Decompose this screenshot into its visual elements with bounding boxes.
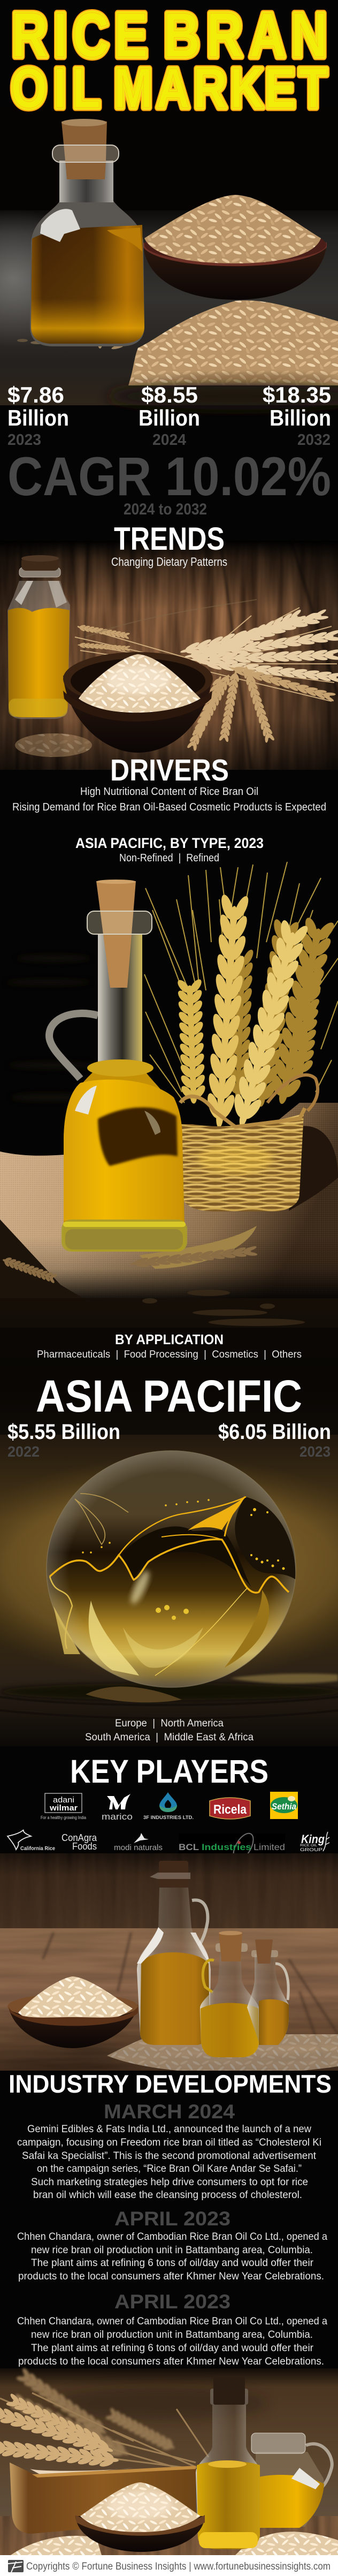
small oil jug back: [247, 1939, 289, 2045]
title line 1: RICEBRAN: [11, 0, 327, 70]
rice heap in foreground: [17, 300, 338, 410]
development: March 2024: Such marketing strategies help drive consumers to opt for rice: [31, 2177, 308, 2188]
stat 2024: 2024: [152, 431, 186, 449]
development: April 2023 second entry: APRIL 2023: [114, 2291, 231, 2313]
logo: BCL Industries Limited: [179, 1830, 285, 1863]
key players panel: [0, 1746, 338, 1863]
development: April 2023: APRIL 2023: [114, 2208, 231, 2230]
development: April 2023 second entry: products to the local consumers after Khmer New Year Celebrations.: [18, 2356, 324, 2367]
logo: marico: [102, 1794, 133, 1822]
rice in bowl: [63, 652, 213, 753]
trends text: Changing Dietary Patterns: [111, 555, 227, 569]
type segments: Non-Refined | Refined: [119, 852, 219, 864]
lower golden swirls: [53, 1569, 269, 1676]
Asia Pacific headline: ASIA PACIFIC: [36, 1371, 302, 1421]
title: [11, 0, 327, 120]
scattered grains: [1, 1245, 259, 1284]
wheat ears: [175, 892, 338, 1131]
development: April 2023: The plant aims at refining 6 tons of oil/day and would offer their: [31, 2257, 314, 2269]
title line 2: OILMARKET: [11, 56, 327, 120]
stat 2032: $18.35: [263, 382, 331, 407]
photo: oil sphere background: [0, 1290, 338, 1746]
wheat sheaf: [75, 600, 338, 752]
stat 2024: Billion: [139, 405, 200, 430]
development: March 2024: Gemini Edibles & Fats India Ltd., announced the launch of a new: [27, 2124, 311, 2135]
development: March 2024: on the campaign series, “Rice Bran Oil Kare Andar Se Safai.”: [37, 2163, 302, 2175]
value 2022: $5.55 Billion: [7, 1420, 120, 1444]
stat 2023: Billion: [7, 405, 69, 430]
title line 1: RICEBRAN: [11, 0, 327, 70]
heading: key players: KEY PLAYERS: [70, 1753, 268, 1790]
logo: California Rice: California Rice: [20, 1846, 55, 1852]
rice bowl: [7, 1976, 138, 2048]
logo: BCL Industries Limited: Limited: [253, 1842, 285, 1852]
logo: BCL Industries Limited: Industries: [202, 1842, 251, 1852]
logo: adani wilmar: [41, 1793, 86, 1820]
logo: modi naturals: modi naturals: [114, 1843, 163, 1852]
icon: Fortune Business Insights logo: [8, 2560, 24, 2572]
oil bottle: [7, 555, 70, 719]
title line 2: OILMARKET: [11, 56, 327, 120]
wooden trough: [10, 2463, 196, 2534]
CAGR callout: 2024 to 2032: [124, 501, 207, 518]
logo: King rice oil group: King: [301, 1832, 325, 1846]
development: March 2024: MARCH 2024: [104, 2101, 235, 2123]
value 2022: 2022: [7, 1443, 40, 1460]
development: April 2023 second entry: The plant aims at refining 6 tons of oil/day and would offer their: [31, 2343, 314, 2354]
logo: 3F Industries: 3F INDUSTRIES LTD.: [143, 1815, 194, 1821]
value 2023: 2023: [299, 1443, 331, 1460]
stat 2032: [263, 382, 331, 449]
spilled rice: [107, 2033, 338, 2073]
title line 1: RICEBRAN: [11, 0, 327, 70]
rice pile in bowl: [143, 195, 327, 300]
value 2022: [7, 1420, 120, 1460]
heading: Asia Pacific by type: ASIA PACIFIC, BY TYPE, 2023: [75, 835, 264, 851]
logo: ConAgra Foods: Foods: [72, 1841, 97, 1852]
closing photo: oil bottle, jug, wheat and rice: [0, 2366, 338, 2555]
development: April 2023 second entry: Chhen Chandara, owner of Cambodian Rice Bran Oil Co Ltd., opened a: [17, 2316, 327, 2327]
heading: by application: BY APPLICATION: [115, 1331, 224, 1347]
logo: King rice oil group: RICE OIL: [300, 1844, 318, 1847]
logo: Sethia: Sethia: [272, 1801, 296, 1812]
value 2023: [218, 1420, 331, 1460]
spilled rice: [15, 733, 92, 757]
development: April 2023 second entry: [17, 2291, 327, 2367]
development: April 2023: [17, 2208, 327, 2282]
oil jug: [251, 2433, 332, 2528]
trends photo: bottle, bowl and wheat on wood: [0, 541, 338, 770]
footer bar: [0, 2555, 338, 2576]
development: April 2023: products to the local consumers after Khmer New Year Celebrations.: [18, 2271, 324, 2282]
developments panel: [0, 2070, 338, 2368]
logo: California Rice: [7, 1830, 55, 1852]
stat 2032: Billion: [270, 405, 331, 430]
heading: trends: TRENDS: [114, 521, 225, 557]
regions list: [85, 1718, 253, 1743]
development: April 2023: new rice bran oil production unit in Battambang area, Columbia.: [31, 2245, 313, 2256]
heading: drivers: DRIVERS: [110, 753, 229, 787]
logo: marico: marico: [102, 1812, 133, 1822]
awns: [144, 862, 338, 1103]
development: March 2024: [17, 2101, 321, 2201]
rice piles on table: [11, 2536, 102, 2555]
photo: bottles and rice bowl on table: [0, 1853, 338, 2073]
large oil jug: [137, 1861, 211, 2045]
hero photo: oil bottle with rice bowl: [0, 107, 338, 410]
logo: ConAgra Foods: [62, 1832, 97, 1852]
heading: drivers: [0, 753, 338, 839]
development: March 2024: Safai ka Specialist”. This is the second promotional advertisement: [22, 2150, 317, 2162]
stat 2023: 2023: [7, 431, 41, 449]
wheat bundle: [0, 2366, 209, 2473]
logo: ConAgra Foods: ConAgra: [62, 1832, 97, 1843]
stat 2024: [139, 382, 200, 449]
burlap cloth: [0, 1103, 338, 1301]
development: April 2023 second entry: new rice bran oil production unit in Battambang area, Columbia.: [31, 2329, 313, 2340]
logo: Ricela: Ricela: [213, 1802, 247, 1817]
logo: King rice oil group: GROUP: [300, 1847, 322, 1852]
stat 2032: 2032: [297, 431, 331, 449]
oil streaks: [50, 1497, 289, 1649]
regions list: South America | Middle East & Africa: [85, 1732, 253, 1743]
title line 2: OILMARKET: [11, 56, 327, 120]
stat 2024: $8.55: [141, 382, 198, 407]
dark middle band: [121, 1526, 251, 1587]
logo: modi naturals: [114, 1833, 163, 1852]
title line 1: RICEBRAN: [11, 0, 327, 70]
oil bottle: [196, 2377, 260, 2549]
wicker basket: [180, 1075, 318, 1211]
droplets: [82, 1499, 285, 1570]
stat 2023: [7, 382, 69, 449]
logo: adani wilmar: For a healthy growing India: [41, 1815, 86, 1820]
market size statistics: [7, 382, 331, 449]
small oil jug front: [200, 1931, 259, 2057]
dark right lobe: [235, 1497, 295, 1579]
stat 2023: $7.86: [7, 382, 64, 407]
logo: Ricela: [210, 1798, 250, 1819]
development: March 2024: campaign, focusing on Freedom rice bran oil titled as “Cholesterol Ki: [17, 2137, 321, 2148]
photo: oil cruet with wheat basket: [0, 862, 338, 1301]
drivers text: High Nutritional Content of Rice Bran Oil: [80, 786, 258, 798]
application segments: Pharmaceuticals | Food Processing | Cosmetics | Others: [37, 1349, 302, 1360]
drivers text: [12, 786, 326, 813]
regions list: Europe | North America: [115, 1718, 224, 1729]
logo: BCL Industries Limited: BCL: [179, 1842, 199, 1852]
rice bowl: [75, 2482, 205, 2552]
development: April 2023: Chhen Chandara, owner of Cambodian Rice Bran Oil Co Ltd., opened a: [17, 2231, 327, 2242]
logo: Sethia: [270, 1792, 298, 1819]
logo: adani wilmar: wilmar: [49, 1804, 78, 1813]
cruet bottle: [49, 880, 187, 1252]
logo: 3F Industries: [143, 1792, 194, 1821]
Asia Pacific values: [7, 1420, 331, 1460]
title line 2: OILMARKET: [11, 56, 327, 120]
logo: adani wilmar: adani: [53, 1795, 74, 1805]
oil sphere illustration: [47, 1451, 296, 1687]
glass bottle: [30, 119, 144, 346]
logo: King rice oil group: [300, 1832, 329, 1852]
development: March 2024: bran oil which will ease the cleansing process of cholesterol.: [33, 2189, 302, 2201]
